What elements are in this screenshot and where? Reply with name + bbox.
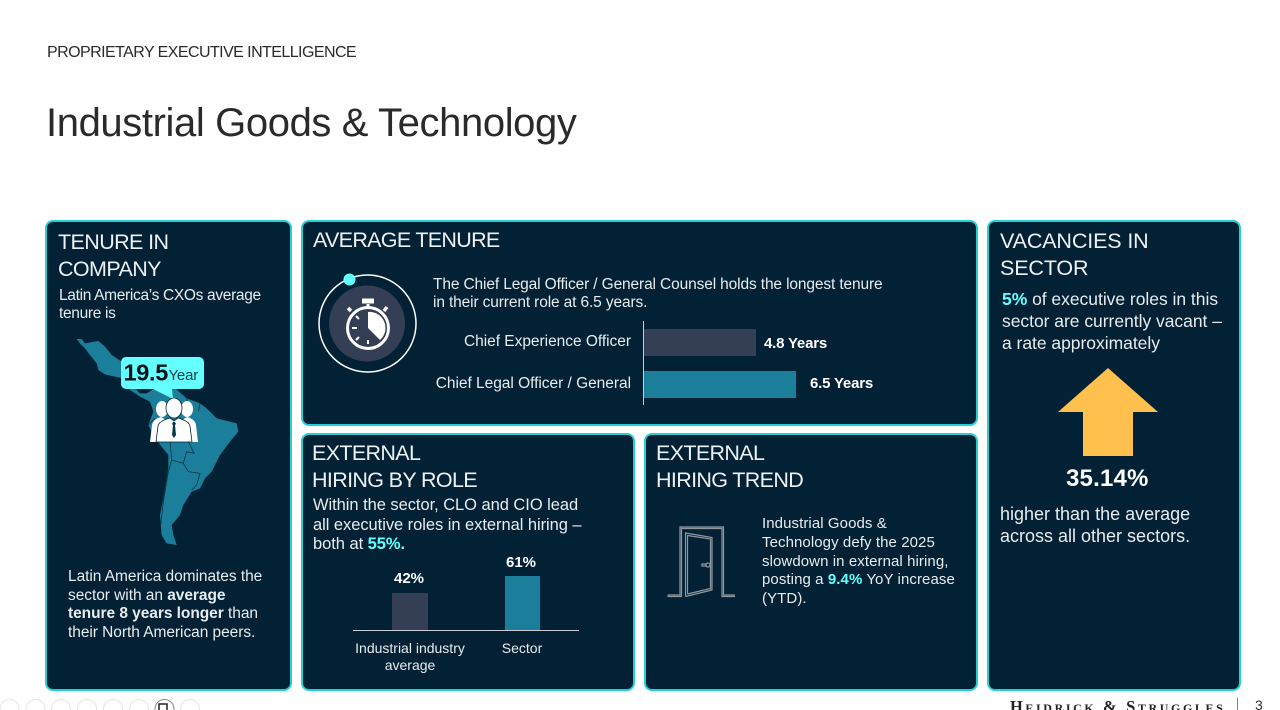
heading: vacancies in sector: [1000, 229, 1149, 280]
bar: sector: [505, 576, 540, 631]
text: Latin America dominates: sector with an average: [68, 587, 225, 604]
text: higher than average: higher than the average: [1000, 504, 1190, 524]
icon: executives group: [150, 398, 198, 442]
value: 4.8 years: 4.8 Years: [764, 335, 827, 352]
heading: tenure in company: TENURE IN: [58, 230, 168, 254]
text: vacancy rate: 5% of executive roles in this: [1002, 289, 1218, 309]
text: vacancy rate: [1002, 289, 1222, 353]
heading: vacancies in sector: SECTOR: [1000, 256, 1088, 280]
title: Industrial Goods & Technology: [46, 101, 577, 145]
heading: average tenure: AVERAGE TENURE: [313, 228, 500, 252]
text: longest tenure: The Chief Legal Officer / General Counsel holds the longest tenure: [433, 276, 883, 293]
text: longest tenure: [433, 276, 883, 311]
chart: tenure bars: [436, 321, 873, 405]
heading: external hiring trend: [656, 441, 803, 492]
map: Latin America: [76, 339, 238, 545]
text: Latin America dominates: their North American peers.: [68, 624, 255, 641]
bar: 4.8 years: [644, 329, 756, 356]
heading: external hiring trend: HIRING TREND: [656, 468, 803, 492]
text: tenure intro: [59, 287, 261, 322]
heading: tenure in company: [58, 230, 168, 280]
value: 61%: 61%: [506, 554, 536, 571]
text: vacancy rate: sector are currently vacant –: [1002, 311, 1222, 331]
chart: external hiring bars: [353, 554, 579, 673]
label: industrial industry average: average: [385, 656, 435, 672]
panel: tenure in company: [45, 220, 292, 691]
text: higher than average: across all other sectors.: [1000, 526, 1190, 546]
callout: 19.5 years: 19.5: [124, 360, 168, 386]
callout: 19.5 years: [121, 357, 204, 398]
text: hiring trend: (YTD).: [762, 590, 807, 607]
text: Latin America dominates: tenure 8 years longer than: [68, 605, 258, 622]
panel: external hiring by role: [301, 433, 635, 691]
panel: vacancies in sector: [987, 220, 1241, 691]
panel: external hiring trend: [644, 433, 978, 691]
text: Latin America dominates: [68, 568, 262, 641]
label: sector: Sector: [502, 640, 542, 656]
text: CLO and CIO: both at 55%.: [313, 535, 405, 553]
axis: [353, 630, 579, 631]
label: chief legal officer: Chief Legal Officer / General: [436, 375, 631, 392]
stat: 35.14%: 35.14%: [1066, 465, 1149, 492]
divider: [1237, 698, 1238, 710]
callout: 19.5 years: Year: [168, 367, 198, 384]
label: industrial industry average: Industrial industry: [355, 640, 465, 656]
text: hiring trend: [762, 515, 955, 607]
heading: external hiring by role: [312, 441, 477, 492]
heading: external hiring trend: EXTERNAL: [656, 441, 764, 465]
eyebrow heading: PROPRIETARY EXECUTIVE INTELLIGENCE: [47, 44, 356, 61]
text: tenure intro: Latin America’s CXOs average: [59, 287, 261, 304]
text: CLO and CIO: [313, 496, 582, 553]
heading: external hiring by role: HIRING BY ROLE: [312, 468, 477, 492]
text: tenure intro: tenure is: [59, 305, 116, 322]
text: longest tenure: in their current role at 6.5 years.: [433, 294, 647, 311]
label: chief experience officer: Chief Experience Officer: [464, 333, 631, 350]
axis: [643, 321, 644, 405]
icon: door: [668, 526, 735, 598]
bar: industry average: [392, 593, 428, 631]
value: 42%: 42%: [394, 570, 424, 587]
heading: vacancies in sector: VACANCIES IN: [1000, 229, 1149, 253]
text: hiring trend: Technology defy the 2025: [762, 534, 935, 551]
text: hiring trend: posting a 9.4% YoY increase: [762, 571, 955, 588]
player controls: [0, 699, 200, 710]
bar: 6.5 years: [644, 371, 796, 398]
heading: external hiring by role: EXTERNAL: [312, 441, 420, 465]
text: higher than average: [1000, 504, 1190, 546]
value: 6.5 years: 6.5 Years: [810, 375, 873, 392]
icon: stopwatch: [318, 274, 417, 373]
text: hiring trend: Industrial Goods &: [762, 515, 887, 532]
heading: tenure in company: COMPANY: [58, 256, 161, 280]
text: CLO and CIO: Within the sector, CLO and CIO lead: [313, 496, 578, 514]
text: Latin America dominates: Latin America dominates the: [68, 568, 262, 585]
panel: average tenure: [301, 220, 978, 426]
text: CLO and CIO: all executive roles in external hiring –: [313, 516, 582, 534]
label: industrial industry average: [355, 640, 465, 673]
text: hiring trend: slowdown in external hiring,: [762, 553, 949, 570]
text: vacancy rate: a rate approximately: [1002, 333, 1160, 353]
icon: up arrow: [1058, 368, 1158, 456]
